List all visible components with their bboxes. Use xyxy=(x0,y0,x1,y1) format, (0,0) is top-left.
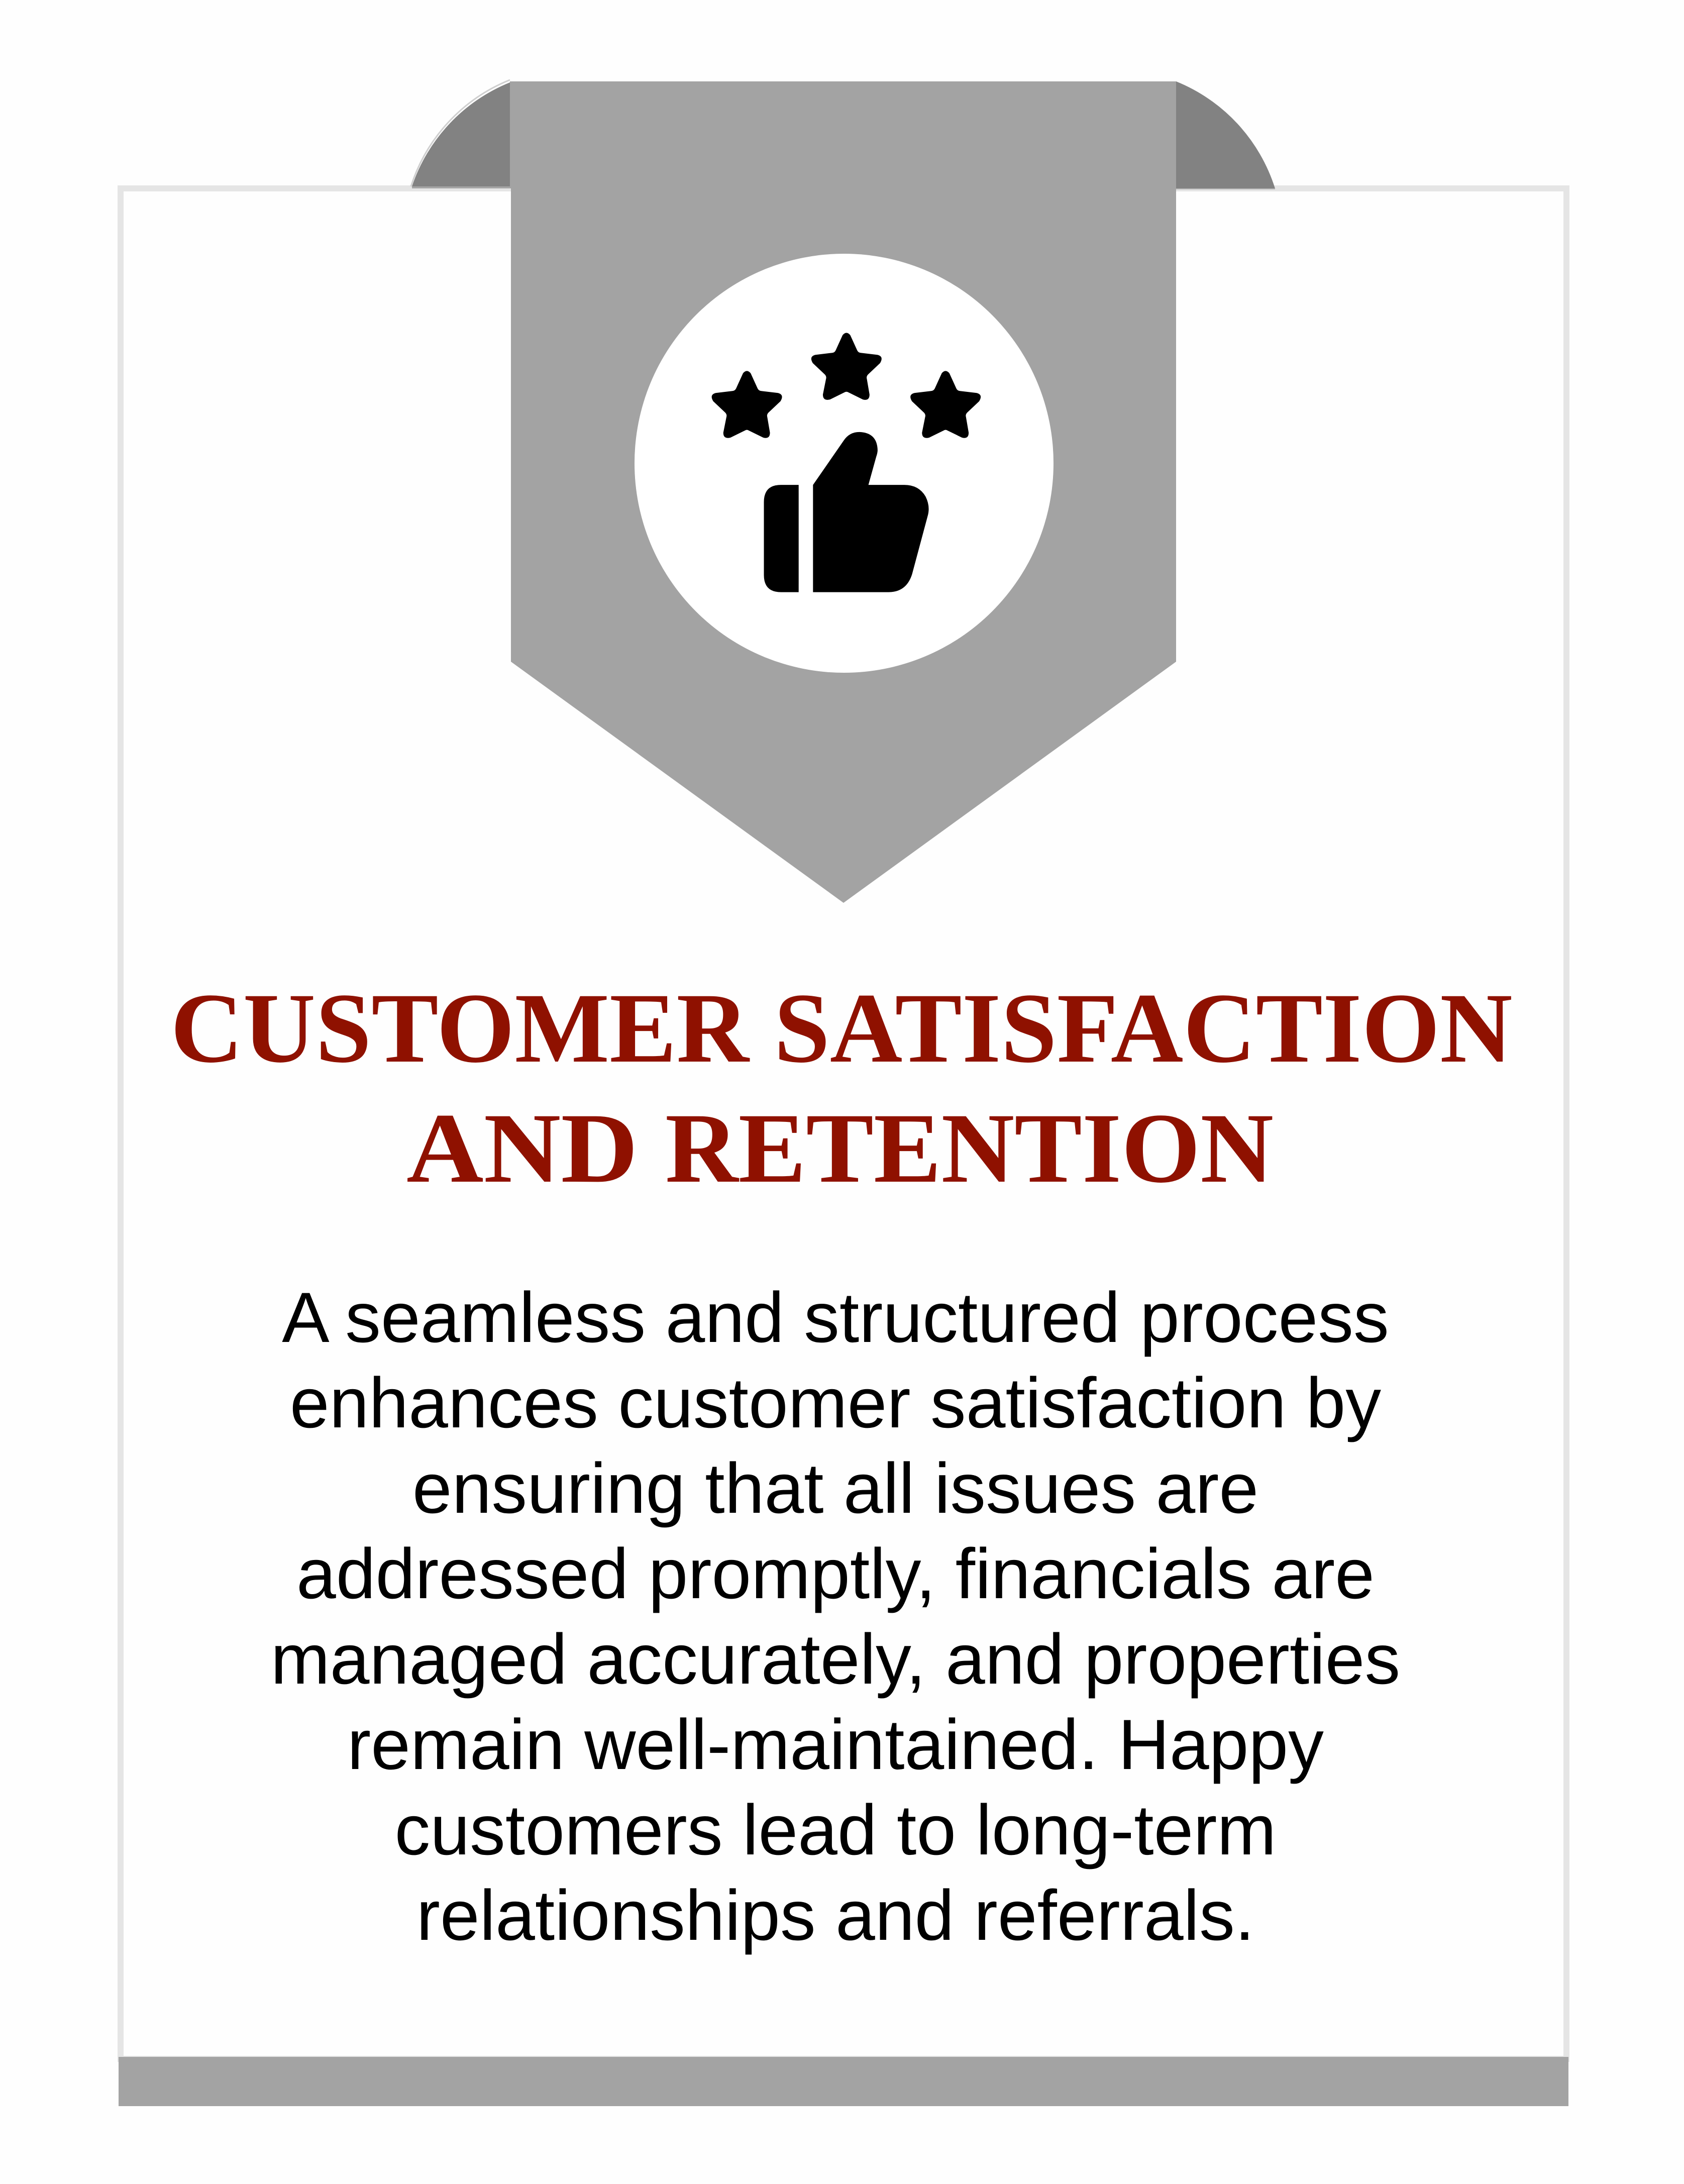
ribbon fold: left ear xyxy=(411,80,511,188)
icon circle xyxy=(635,254,1054,673)
body text: addressed promptly, financials are xyxy=(296,1534,1375,1614)
icon: right star xyxy=(910,371,981,438)
body text: enhances customer satisfaction by xyxy=(290,1364,1381,1443)
footer bar xyxy=(119,2057,1568,2106)
icon: thumb hand xyxy=(813,432,929,592)
body text: relationships and referrals. xyxy=(416,1876,1254,1955)
body text: remain well-maintained. Happy xyxy=(347,1705,1324,1785)
title xyxy=(171,973,1512,1204)
title: CUSTOMER SATISFACTION xyxy=(171,973,1512,1084)
title: RETENTION xyxy=(665,1093,1274,1204)
title: AND xyxy=(406,1093,638,1204)
icon: three stars and thumbs up xyxy=(712,333,981,592)
body text xyxy=(271,1278,1400,1955)
icon: left star xyxy=(712,371,782,438)
ribbon fold: right ear xyxy=(1176,81,1275,189)
panel: white card with light grey border xyxy=(121,188,1566,2059)
body text: customers lead to long-term xyxy=(395,1791,1276,1870)
body text: ensuring that all issues are xyxy=(412,1449,1258,1528)
ribbon banner xyxy=(510,81,1176,903)
icon: thumb cuff xyxy=(764,485,799,592)
icon: center star xyxy=(811,333,882,400)
body text: A seamless and structured process xyxy=(282,1278,1389,1358)
body text: managed accurately, and properties xyxy=(271,1620,1400,1699)
